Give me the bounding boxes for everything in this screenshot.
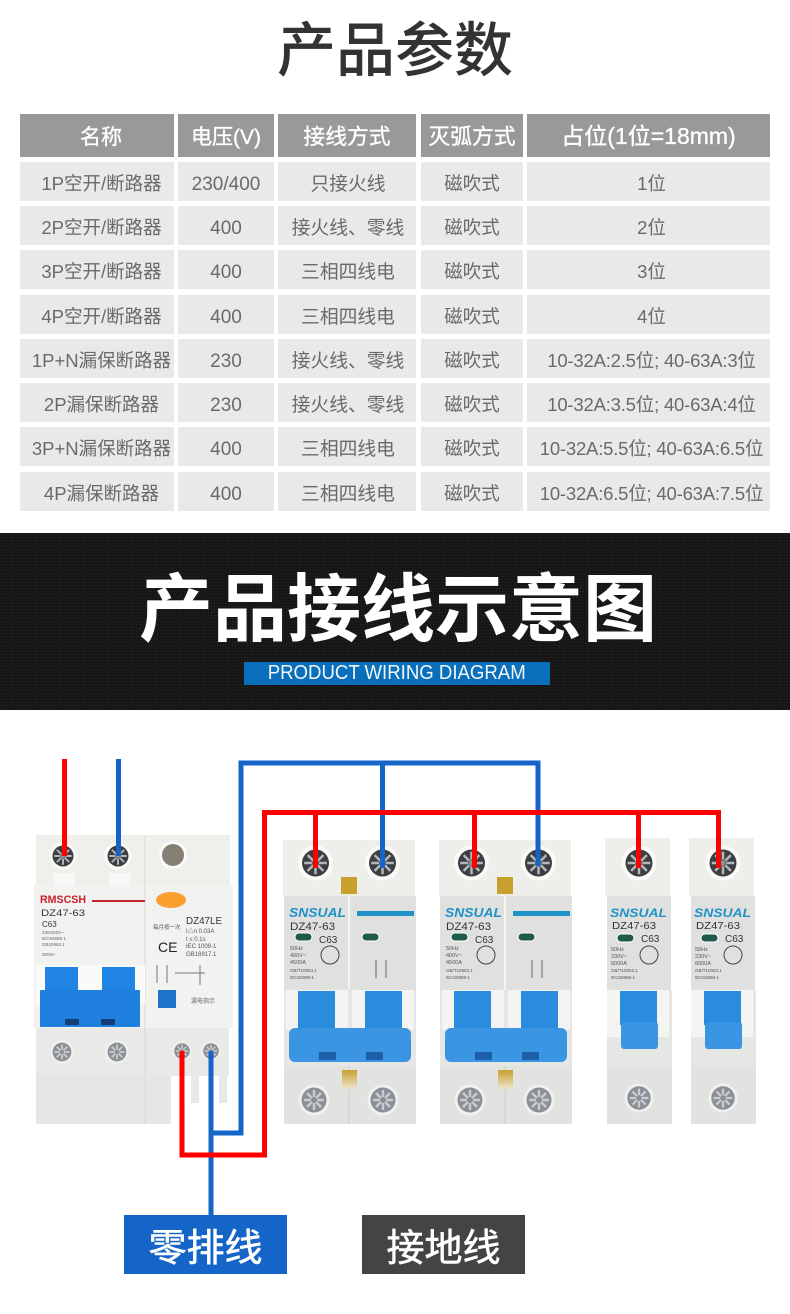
breaker: SNSUAL 1P A: GB/T10063.1 xyxy=(611,968,638,973)
breaker: SNSUAL 1P B: 230V~ xyxy=(695,954,711,960)
row: 1P: 1位 xyxy=(637,172,666,194)
row: 2P leakage: 接火线、零线 xyxy=(292,394,404,415)
breaker: SNSUAL 1P B: 6000A xyxy=(695,961,711,967)
breaker: leakage protector DZ47LE: IEC60898-1 xyxy=(42,936,67,941)
breaker: leakage protector DZ47LE: C63 xyxy=(42,920,57,929)
row: 4P leakage: 三相四线电 xyxy=(301,483,395,504)
table header: 名称 xyxy=(80,126,122,148)
row: 1P: 磁吹式 xyxy=(444,172,500,194)
breaker: leakage protector DZ47LE: 每月按一次 xyxy=(153,923,181,931)
breaker: SNSUAL 2P A: 400V~ xyxy=(290,953,306,959)
breaker: SNSUAL 2P B xyxy=(439,840,572,1124)
row: 1P: 只接火线 xyxy=(310,173,386,194)
row: 2P: 2位 xyxy=(637,216,666,238)
row: 4P: 4位 xyxy=(637,306,666,326)
row: 3P+N: 10-32A:5.5位; 40-63A:6.5位 xyxy=(540,438,763,458)
row: 3P+N xyxy=(20,427,770,466)
parameter table xyxy=(20,114,770,511)
breaker: leakage protector DZ47LE: 漏电指示 xyxy=(191,997,215,1005)
label: ground wire xyxy=(362,1215,525,1274)
row: 2P leakage: 10-32A:3.5位; 40-63A:4位 xyxy=(547,394,756,414)
red live wires xyxy=(64,759,718,1155)
blue neutral wires xyxy=(118,759,538,1215)
row: 4P: 400 xyxy=(210,306,242,328)
row: 2P leakage: 2P漏保断路器 xyxy=(44,394,159,414)
row: 3P: 三相四线电 xyxy=(301,261,395,282)
breaker: SNSUAL 1P A: 6000A xyxy=(611,961,627,967)
row: 4P: 三相四线电 xyxy=(301,306,395,327)
row: 4P leakage: 磁吹式 xyxy=(444,482,500,504)
breaker: leakage protector DZ47LE: GB10963.1 xyxy=(42,942,65,947)
row: 3P xyxy=(20,250,770,289)
breaker: SNSUAL 1P B: C63 xyxy=(725,934,744,945)
breaker: leakage protector DZ47LE: RMSCSH xyxy=(40,894,86,906)
breaker: SNSUAL 1P A: 50Hz xyxy=(611,947,624,953)
title: product parameters: 产品参数 xyxy=(277,18,513,84)
breaker: SNSUAL 2P A: SNSUAL xyxy=(289,906,346,920)
row: 3P: 3位 xyxy=(637,260,666,282)
breaker: leakage protector DZ47LE: IEC 1009-1 xyxy=(186,944,217,950)
breaker: SNSUAL 2P B: DZ47-63 xyxy=(446,921,491,933)
row: 2P leakage: 230 xyxy=(210,394,242,416)
row: 1P+N: 10-32A:2.5位; 40-63A:3位 xyxy=(547,350,756,370)
breaker: SNSUAL 1P A: C63 xyxy=(641,934,660,945)
breaker: SNSUAL 2P B: GB/T10963.1 xyxy=(446,968,473,973)
banner heading: 产品接线示意图 xyxy=(139,568,657,651)
row: 1P+N: 磁吹式 xyxy=(444,350,500,370)
banner subtitle: PRODUCT WIRING DIAGRAM xyxy=(268,662,526,684)
breaker: leakage protector DZ47LE: 230/400V~ xyxy=(42,930,64,935)
breaker: SNSUAL 1P A xyxy=(605,838,672,1124)
breaker: leakage protector DZ47LE: DZ47LE xyxy=(186,916,222,927)
table header xyxy=(20,114,770,157)
breaker: SNSUAL 1P B: IEC60898-1 xyxy=(695,975,720,980)
row: 2P: 400 xyxy=(210,218,242,238)
row: 4P: 4P空开/断路器 xyxy=(41,306,162,326)
row: 3P: 磁吹式 xyxy=(444,260,500,282)
breaker: SNSUAL 2P B: C63 xyxy=(475,935,494,946)
breaker: SNSUAL 2P A: DZ47-63 xyxy=(290,921,335,933)
breaker: SNSUAL 2P A: C63 xyxy=(319,935,338,946)
breaker: leakage protector DZ47LE xyxy=(34,835,233,1124)
breaker: SNSUAL 2P A: 50Hz xyxy=(290,946,303,952)
row: 2P xyxy=(20,206,770,245)
breaker: SNSUAL 1P A: SNSUAL xyxy=(610,906,667,920)
row: 1P+N: 1P+N漏保断路器 xyxy=(32,350,171,370)
breaker: leakage protector DZ47LE: t ≤ 0.1s xyxy=(186,937,206,943)
row: 4P leakage: 4P漏保断路器 xyxy=(44,482,159,504)
breaker: SNSUAL 2P B: SNSUAL xyxy=(445,906,502,920)
row: 4P leakage xyxy=(20,472,770,511)
breaker: leakage protector DZ47LE: DZ47-63 xyxy=(41,908,85,919)
table header: 接线方式 xyxy=(303,124,391,149)
label: ground wire: 接地线 xyxy=(386,1228,500,1270)
breaker: SNSUAL 2P B: 400V~ xyxy=(446,953,462,959)
breaker: SNSUAL 2P B: IEC60898-1 xyxy=(446,975,471,980)
row: 1P: 1P空开/断路器 xyxy=(41,172,162,194)
row: 3P+N: 三相四线电 xyxy=(301,438,395,459)
row: 1P+N: 230 xyxy=(210,350,242,372)
dark banner xyxy=(0,533,790,710)
row: 1P+N xyxy=(20,339,770,378)
table header: 电压(V) xyxy=(191,126,261,148)
breaker: SNSUAL 1P B: DZ47-63 xyxy=(696,920,740,932)
breaker: SNSUAL 2P A xyxy=(283,840,416,1124)
breaker: SNSUAL 1P B xyxy=(689,838,756,1124)
breaker: SNSUAL 2P A: GB/T10963.1 xyxy=(290,968,317,973)
breaker: SNSUAL 1P B: SNSUAL xyxy=(694,906,751,920)
breaker: SNSUAL 2P B: 50Hz xyxy=(446,946,459,952)
breaker: SNSUAL 1P A: DZ47-63 xyxy=(612,920,656,932)
breaker: SNSUAL 2P A: 4500A xyxy=(290,960,306,966)
row: 3P+N: 3P+N漏保断路器 xyxy=(32,438,171,458)
table header: 灭弧方式 xyxy=(428,124,516,149)
breaker: leakage protector DZ47LE: 3000A xyxy=(42,952,55,957)
breaker: SNSUAL 1P B: 50Hz xyxy=(695,947,708,953)
breaker: leakage protector DZ47LE: I△n 0.03A xyxy=(186,927,214,935)
row: 2P leakage xyxy=(20,383,770,422)
breaker: SNSUAL 2P A: IEC60898-1 xyxy=(290,975,315,980)
row: 4P leakage: 10-32A:6.5位; 40-63A:7.5位 xyxy=(540,482,763,504)
row: 2P: 2P空开/断路器 xyxy=(41,216,162,238)
row: 1P+N: 接火线、零线 xyxy=(292,350,404,371)
row: 3P: 400 xyxy=(210,262,242,282)
breaker: SNSUAL 2P B: 4500A xyxy=(446,960,462,966)
row: 1P xyxy=(20,162,770,201)
breaker: leakage protector DZ47LE: GB16917.1 xyxy=(186,952,217,958)
row: 4P: 磁吹式 xyxy=(444,306,500,326)
row: 4P leakage: 400 xyxy=(210,484,242,504)
row: 2P leakage: 磁吹式 xyxy=(444,394,500,414)
row: 1P: 230/400 xyxy=(192,174,260,194)
breaker: leakage protector DZ47LE: CE xyxy=(158,939,177,955)
row: 3P: 3P空开/断路器 xyxy=(41,260,162,282)
row: 3P+N: 磁吹式 xyxy=(444,438,500,458)
row: 4P xyxy=(20,295,770,334)
breaker: SNSUAL 1P B: GB/T10063.1 xyxy=(695,968,722,973)
label: neutral bus: 零排线 xyxy=(148,1228,262,1270)
table header: 占位(1位=18mm) xyxy=(561,122,736,148)
breaker: SNSUAL 1P A: 230V~ xyxy=(611,954,627,960)
row: 2P: 接火线、零线 xyxy=(292,217,404,238)
label: neutral bus xyxy=(124,1215,287,1274)
row: 3P+N: 400 xyxy=(210,438,242,460)
row: 2P: 磁吹式 xyxy=(444,216,500,238)
breaker: SNSUAL 1P A: IEC60898-1 xyxy=(611,975,636,980)
